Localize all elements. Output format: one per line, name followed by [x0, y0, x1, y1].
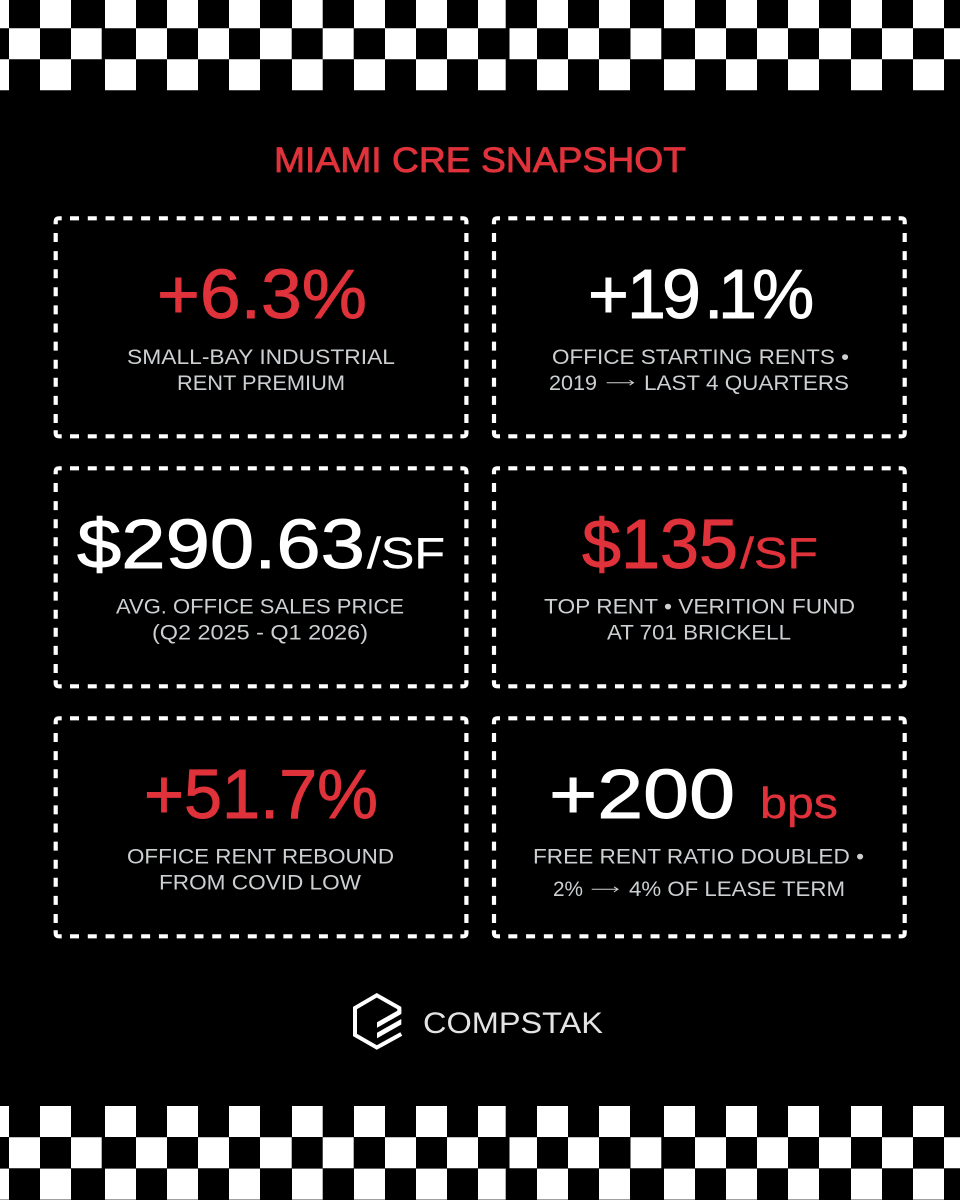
label: rent premium: RENT PREMIUM — [177, 371, 345, 395]
panel: office starting rents — [494, 218, 905, 436]
label: avg. office sales price: AVG. OFFICE SALES PRICE — [116, 594, 404, 618]
unit: /SF: /SF — [740, 529, 818, 578]
arrow — [607, 380, 634, 385]
panel: small-bay industrial rent premium — [56, 218, 466, 436]
label: office starting rents: OFFICE STARTING RENTS • — [552, 345, 849, 369]
panel: office rent rebound — [56, 718, 466, 936]
wordmark: COMPSTAK — [423, 1007, 603, 1040]
stat: $290.63: $290.63 — [77, 505, 365, 583]
label: small-bay industrial: SMALL-BAY INDUSTRIAL — [127, 345, 395, 369]
panel: free rent ratio — [494, 718, 905, 936]
arrow — [592, 887, 618, 892]
stat: +200: +200 — [549, 755, 735, 833]
logo: compstak — [355, 995, 603, 1048]
label: last 4 quarters: LAST 4 QUARTERS — [644, 371, 849, 395]
title: MIAMI CRE SNAPSHOT — [274, 140, 686, 180]
label: top rent verition fund: TOP RENT • VERITION FUND — [544, 594, 855, 618]
checkered band: top — [0, 0, 960, 90]
label: office rent rebound: OFFICE RENT REBOUND — [127, 844, 394, 868]
checkered band: bottom — [0, 1106, 960, 1200]
panel: average office sales price — [56, 468, 466, 686]
stat: +19.1%: +19.1% — [588, 255, 814, 333]
label: free rent ratio doubled: FREE RENT RATIO DOUBLED • — [533, 844, 864, 868]
unit: bps: bps — [760, 779, 838, 828]
label: 4% of lease term: 4% OF LEASE TERM — [629, 877, 845, 901]
label: at 701 brickell: AT 701 BRICKELL — [607, 620, 791, 644]
panel: top rent — [494, 468, 905, 686]
stat: $135: $135 — [582, 505, 738, 583]
icon: hexagon mark — [355, 995, 401, 1048]
stat: +6.3%: +6.3% — [157, 255, 367, 333]
label: from covid low: FROM COVID LOW — [159, 870, 362, 894]
label: period: (Q2 2025 - Q1 2026) — [152, 620, 368, 644]
stat: +51.7%: +51.7% — [144, 755, 378, 833]
label: 2019: 2019 — [549, 371, 597, 395]
unit: /SF: /SF — [367, 529, 445, 578]
label: 2%: 2% — [553, 877, 583, 901]
